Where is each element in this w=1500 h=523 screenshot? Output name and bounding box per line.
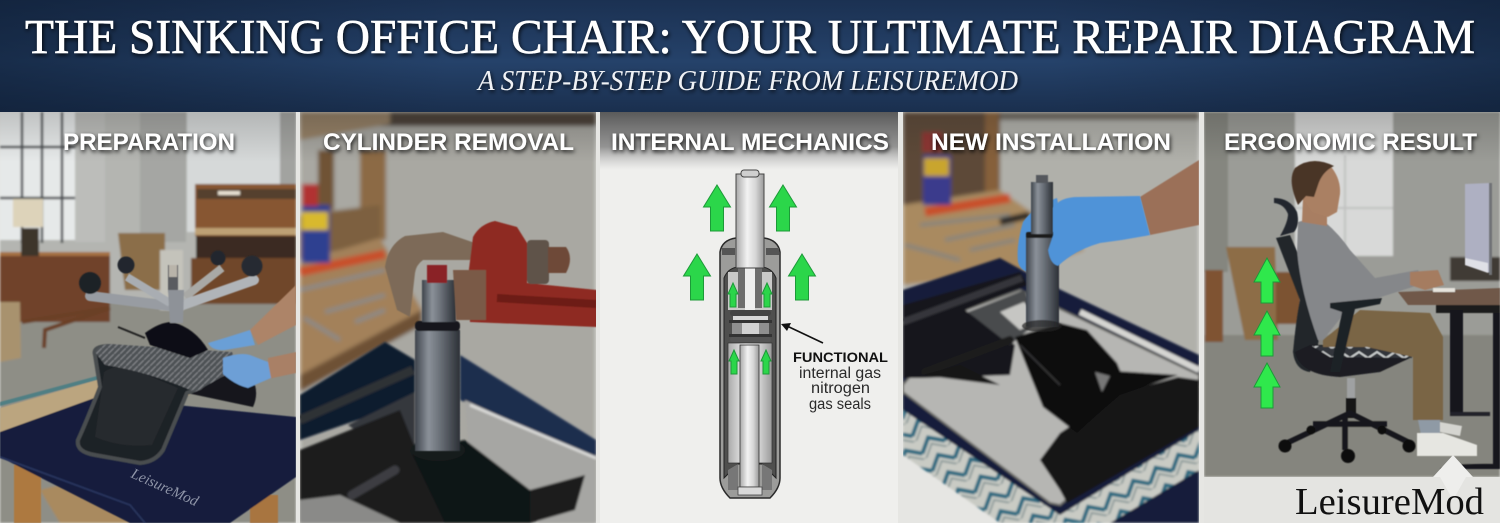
- panel: new installation: [903, 112, 1199, 523]
- pipe wrench: [385, 221, 597, 327]
- panel: cylinder removal: [300, 112, 597, 523]
- callout: nitrogen: [811, 380, 870, 397]
- seals: [730, 310, 771, 316]
- gas cylinder: [1022, 175, 1062, 332]
- seat shell with mesh: [78, 344, 256, 463]
- icon: sparkle: [1433, 455, 1473, 500]
- arrows: upward lift: [1254, 258, 1280, 408]
- office chair: [1274, 198, 1416, 463]
- metal tray: [903, 290, 1199, 505]
- gas cylinder cross-section: [720, 170, 780, 498]
- header banner: [0, 0, 1500, 112]
- heading: ERGONOMIC RESULT: [1224, 129, 1477, 156]
- arm and glove fingers behind cylinder: [1018, 160, 1199, 272]
- arrows: outer upward force: [684, 185, 816, 300]
- title: THE SINKING OFFICE CHAIR: YOUR ULTIMATE REPAIR DIAGRAM: [25, 9, 1475, 64]
- gloved hand over cylinder: [1048, 196, 1150, 266]
- panel: preparation: [0, 112, 296, 523]
- monitor: [1465, 183, 1492, 275]
- five star base: [79, 250, 262, 323]
- black seat plate: [1040, 377, 1199, 503]
- brand footer: LeisureMod: [1295, 481, 1484, 523]
- arrows: internal gas flow: [728, 283, 772, 374]
- oil can: [922, 132, 951, 205]
- callout: gas seals: [809, 396, 871, 413]
- desk: [1398, 288, 1500, 469]
- arrow: callout pointer: [781, 323, 823, 343]
- panel: internal mechanics: [600, 112, 898, 523]
- brand footer: [1204, 456, 1500, 514]
- callout: [793, 349, 888, 413]
- callout: FUNCTIONAL: [793, 349, 888, 365]
- seated person: [1292, 161, 1477, 456]
- panel: ergonomic result: [1204, 112, 1500, 523]
- piston rod: [736, 170, 764, 268]
- gas cylinder: [415, 265, 460, 451]
- subtitle: A STEP-BY-STEP GUIDE FROM LEISUREMOD: [476, 66, 1018, 97]
- control mechanism: [923, 323, 1178, 433]
- callout: internal gas: [799, 365, 881, 382]
- gas lift mechanism: [145, 322, 208, 358]
- heading: INTERNAL MECHANICS: [611, 129, 889, 156]
- towel logo text: LeisureMod: [127, 466, 201, 510]
- heading: PREPARATION: [63, 129, 235, 156]
- oil can: [302, 184, 330, 263]
- heading: CYLINDER REMOVAL: [323, 129, 574, 156]
- patterned seat cushion: [903, 410, 1199, 523]
- heading: NEW INSTALLATION: [931, 129, 1171, 156]
- chair armrest: [1330, 298, 1382, 358]
- hands in blue gloves: [208, 285, 296, 388]
